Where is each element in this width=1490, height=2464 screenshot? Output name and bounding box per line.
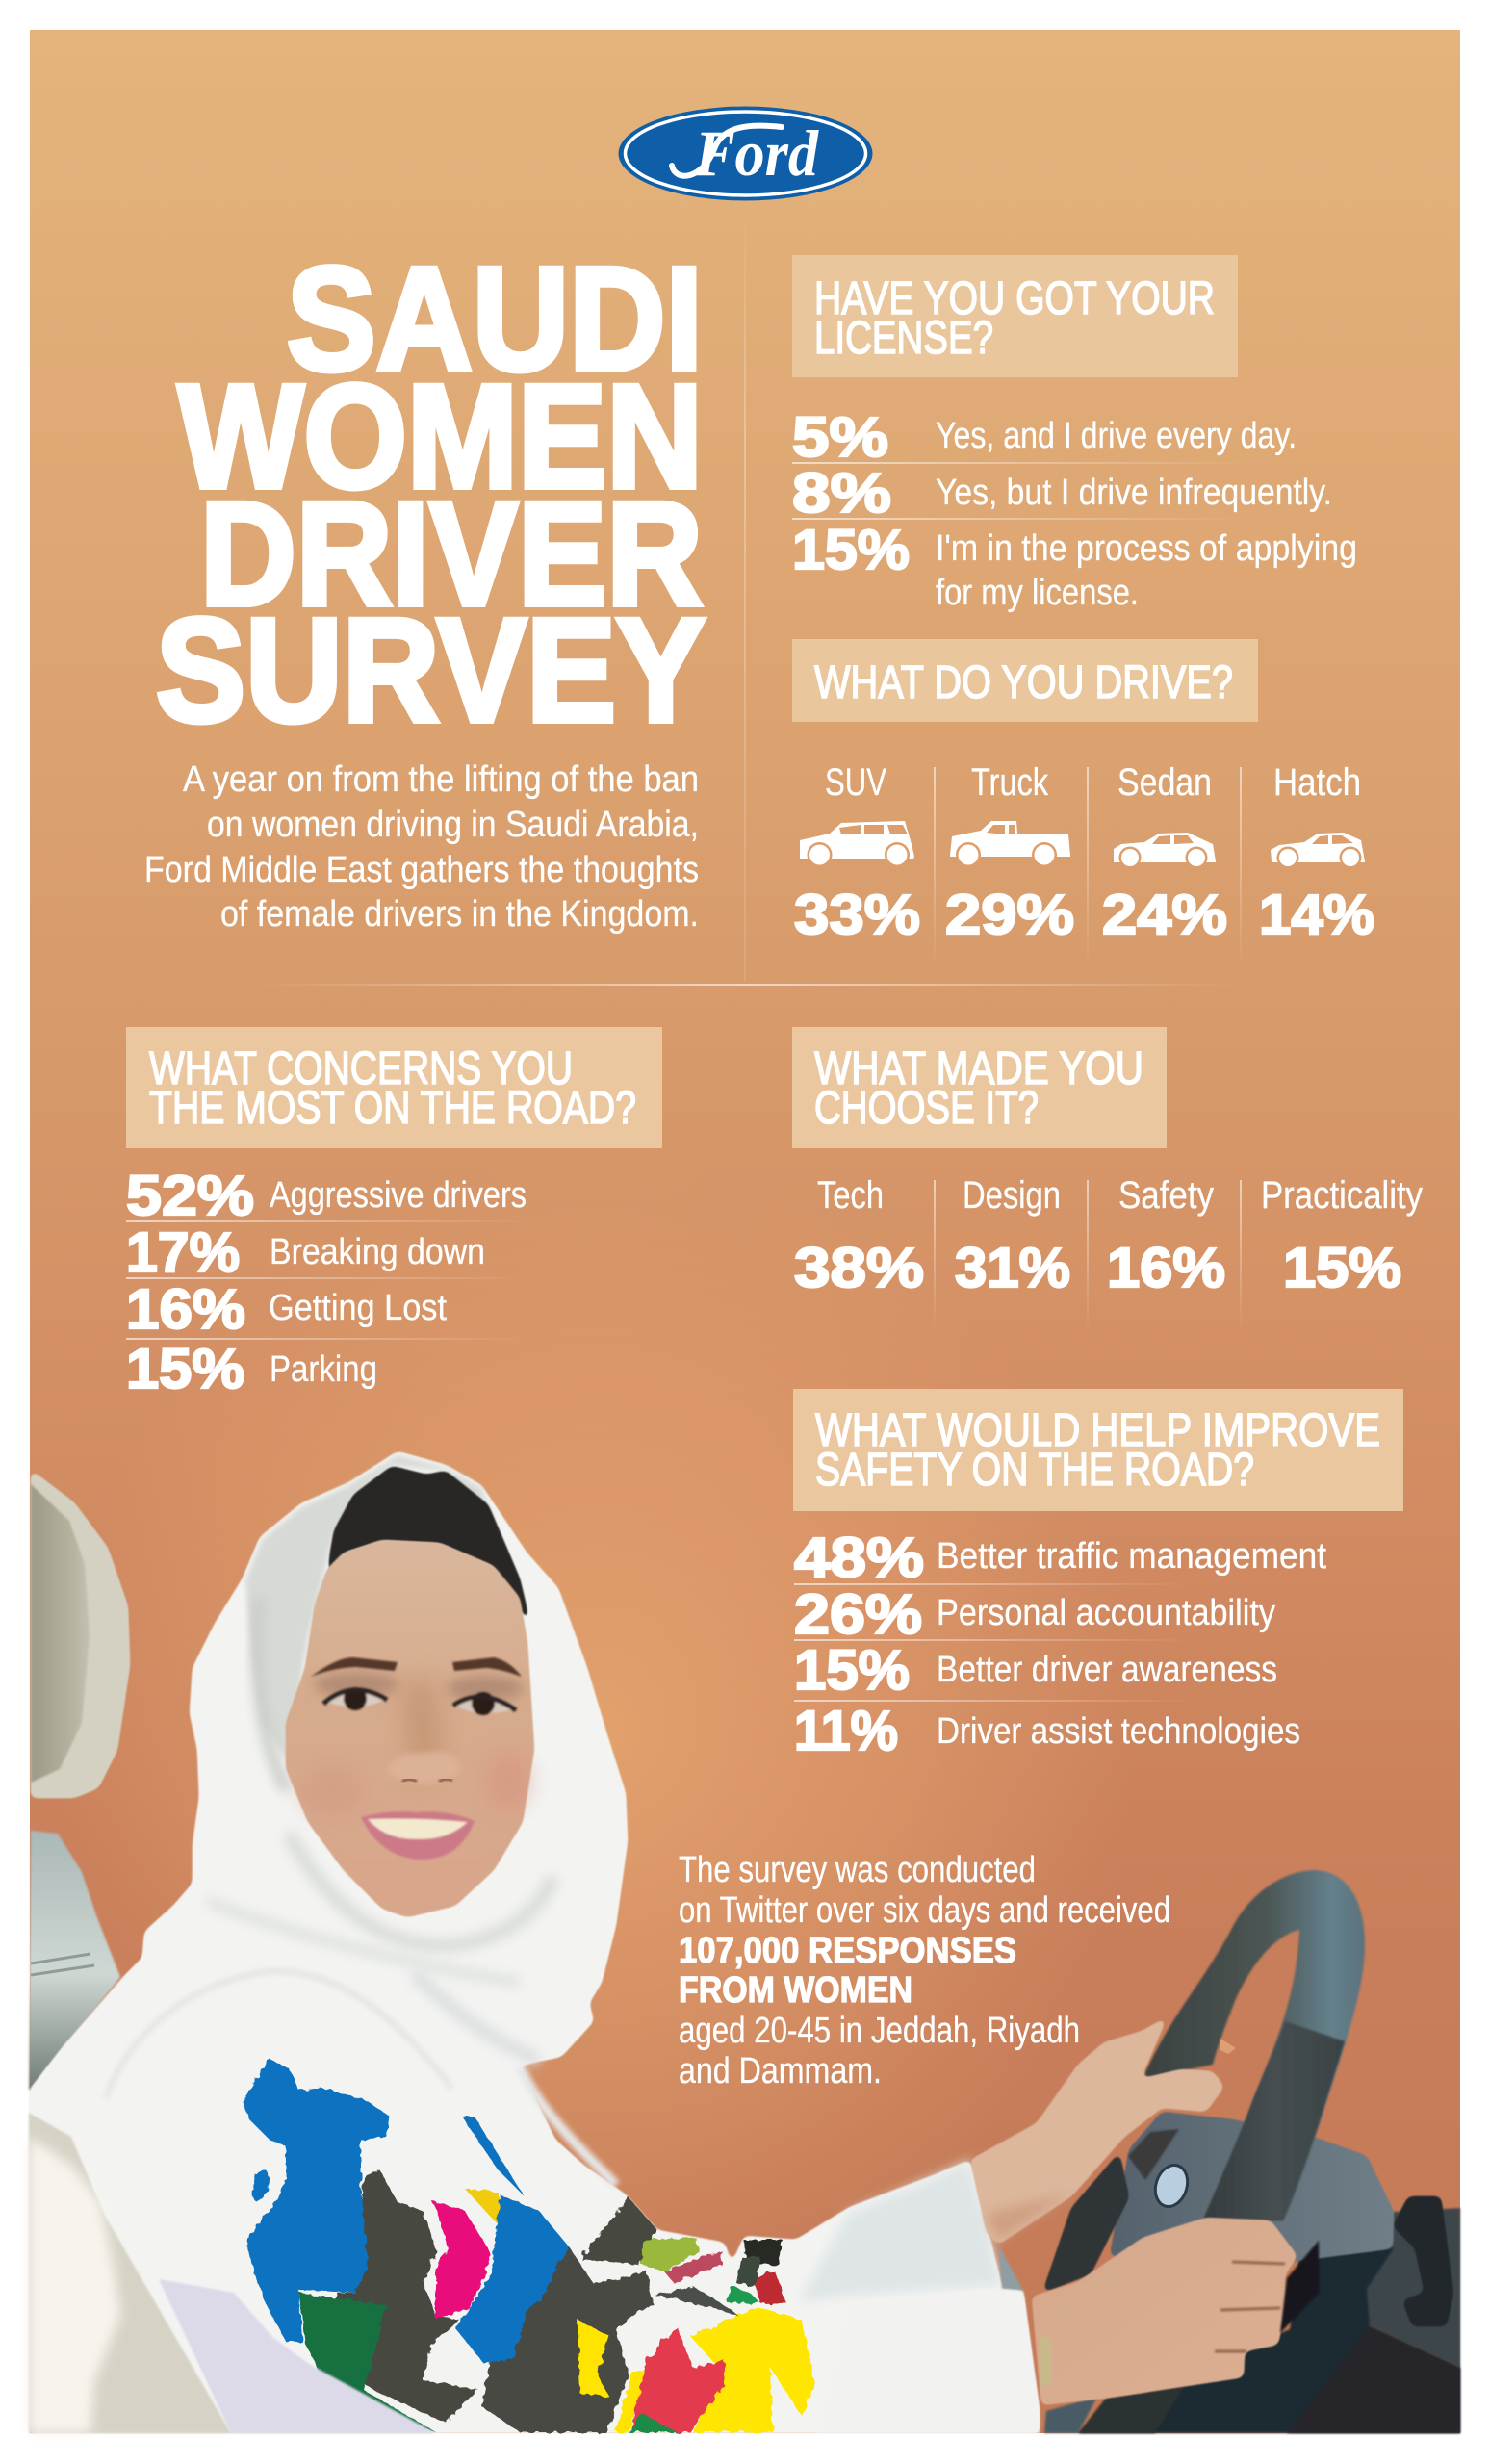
row: 5%: 5% xyxy=(792,406,888,469)
row: 16%: Getting Lost xyxy=(269,1288,447,1328)
intro text: of female drivers in the Kingdom. xyxy=(220,894,699,935)
column: Design xyxy=(955,1174,1070,1299)
heading: license: HAVE YOU GOT YOUR xyxy=(814,273,1215,324)
icon: pickup truck xyxy=(950,821,1070,867)
steering wheel hub xyxy=(1042,2112,1394,2293)
row: 26%: Personal accountability xyxy=(937,1593,1275,1633)
heading: improve safety: WHAT WOULD HELP IMPROVE xyxy=(815,1405,1380,1456)
row: 48%: 48% xyxy=(794,1527,924,1589)
Ford logo xyxy=(618,106,872,200)
hub badge xyxy=(1150,2161,1193,2211)
icon: hatchback xyxy=(1271,833,1365,868)
icon: SUV xyxy=(800,821,914,867)
title: WOMEN xyxy=(178,354,703,519)
seat back xyxy=(29,1831,120,2091)
row: 8%: 8% xyxy=(792,462,891,525)
eyebrows xyxy=(311,1657,522,1677)
sleeve cuff and watch xyxy=(818,2245,1052,2433)
face xyxy=(286,1540,534,1917)
row: 11%: Driver assist technologies xyxy=(937,1711,1300,1752)
row: 11%: 11% xyxy=(794,1700,898,1762)
row: 26%: 26% xyxy=(794,1583,922,1646)
hair xyxy=(327,1466,531,1627)
row: 15%: 15% xyxy=(126,1338,244,1400)
panel: what do you drive xyxy=(792,639,1374,967)
steering column xyxy=(1078,2196,1460,2433)
row: 48% xyxy=(794,1527,1326,1589)
title: DRIVER xyxy=(200,472,703,636)
column: SUV: 33% xyxy=(794,884,920,946)
row: 15% xyxy=(794,1639,1277,1702)
sleeve paint splashes xyxy=(242,2059,815,2432)
blurred foreground seat xyxy=(29,2137,120,2433)
heading: improve safety: SAFETY ON THE ROAD? xyxy=(815,1445,1254,1496)
heading: drive xyxy=(792,639,1258,722)
row: 17%: Breaking down xyxy=(270,1232,485,1272)
column: Practicality: 15% xyxy=(1283,1237,1401,1299)
title: SAUDI xyxy=(287,237,703,401)
heading: improve safety xyxy=(793,1389,1403,1511)
heading: concerns: WHAT CONCERNS YOU xyxy=(149,1043,573,1094)
column: Practicality xyxy=(1261,1174,1423,1299)
column: Truck xyxy=(945,761,1074,946)
column: Sedan: 24% xyxy=(1102,884,1227,946)
heading: concerns: THE MOST ON THE ROAD? xyxy=(149,1083,636,1134)
heading: choose xyxy=(792,1027,1167,1148)
column: Tech: 38% xyxy=(794,1237,924,1299)
row: 15%: 15% xyxy=(794,1639,910,1702)
column: Hatch: 14% xyxy=(1259,884,1374,946)
smile xyxy=(361,1811,475,1860)
survey note: aged 20-45 in Jeddah, Riyadh xyxy=(679,2011,1080,2051)
column: Sedan: Sedan xyxy=(1118,761,1212,804)
row: 8% xyxy=(792,462,1332,525)
column: Design: 31% xyxy=(955,1237,1070,1299)
column: Safety: 16% xyxy=(1107,1237,1225,1299)
car seat side bolster xyxy=(29,2113,231,2433)
row: 17%: 17% xyxy=(126,1221,240,1284)
white hijab and garment xyxy=(29,1451,1040,2433)
background glow behind the woman xyxy=(58,1155,1136,2310)
column: Hatch xyxy=(1259,761,1374,946)
row: 15%: Better driver awareness xyxy=(937,1650,1277,1690)
column: Sedan xyxy=(1102,761,1227,946)
title: SURVEY xyxy=(156,588,706,753)
survey note: FROM WOMEN xyxy=(679,1970,912,2011)
row: 15%: for my license. xyxy=(936,573,1139,613)
column: SUV: SUV xyxy=(825,761,886,804)
heading: choose: CHOOSE IT? xyxy=(814,1083,1039,1134)
intro text xyxy=(144,759,699,935)
Ford logo: Ford xyxy=(694,116,819,190)
row: 15% xyxy=(126,1338,377,1400)
column: Design: Design xyxy=(963,1174,1061,1217)
heading: drive: WHAT DO YOU DRIVE? xyxy=(814,657,1233,708)
headrest xyxy=(31,1470,130,1798)
column: Truck: 29% xyxy=(945,884,1074,946)
panel: license xyxy=(792,255,1357,613)
column: Safety: Safety xyxy=(1118,1174,1214,1217)
row: 8%: Yes, but I drive infrequently. xyxy=(936,473,1332,513)
row: 52%: 52% xyxy=(126,1165,254,1227)
row: 11% xyxy=(794,1700,1300,1762)
row: 52% xyxy=(126,1165,530,1227)
column: Truck: Truck xyxy=(971,761,1049,804)
heading: concerns xyxy=(126,1027,662,1148)
row: 15%: 15% xyxy=(792,519,910,581)
row: 52%: Aggressive drivers xyxy=(270,1175,527,1216)
column: Tech: Tech xyxy=(817,1174,884,1217)
panel: concerns xyxy=(126,1027,662,1400)
intro text: Ford Middle East gathers the thoughts xyxy=(144,850,699,890)
lavender under-garment xyxy=(159,2279,436,2433)
column: Safety xyxy=(1107,1174,1225,1299)
survey note xyxy=(679,1850,1170,2092)
panel: improve safety xyxy=(793,1389,1403,1762)
row: 15% xyxy=(792,519,1357,613)
survey note: 107,000 RESPONSES xyxy=(679,1931,1016,1971)
title xyxy=(156,237,706,753)
column: Hatch: Hatch xyxy=(1273,761,1361,804)
intro text: A year on from the lifting of the ban xyxy=(183,759,699,800)
column: Practicality: Practicality xyxy=(1261,1174,1423,1217)
row: 15%: I'm in the process of applying xyxy=(936,528,1357,569)
panel: what made you choose it xyxy=(792,1027,1423,1330)
row: 5% xyxy=(792,406,1297,469)
heading: license xyxy=(792,255,1238,377)
column: Tech xyxy=(794,1174,924,1299)
icon: sedan xyxy=(1114,833,1216,868)
eyes xyxy=(323,1687,516,1715)
survey note: on Twitter over six days and received xyxy=(679,1890,1170,1931)
lower hand xyxy=(1032,2218,1319,2405)
row: 17% xyxy=(126,1221,530,1284)
steering wheel rim xyxy=(1044,1870,1365,2433)
row: 16% xyxy=(126,1278,530,1341)
intro text: on women driving in Saudi Arabia, xyxy=(207,805,699,845)
column: SUV xyxy=(794,761,920,946)
upper hand and forearm xyxy=(970,2016,1236,2245)
heading: choose: WHAT MADE YOU xyxy=(814,1043,1143,1094)
heading: license: LICENSE? xyxy=(814,313,993,364)
row: 26% xyxy=(794,1583,1275,1646)
photo: woman driving xyxy=(29,1451,1460,2433)
row: 15%: Parking xyxy=(270,1349,377,1390)
row: 5%: Yes, and I drive every day. xyxy=(936,416,1297,456)
survey note: The survey was conducted xyxy=(679,1850,1036,1890)
survey note: and Dammam. xyxy=(679,2051,882,2092)
nose xyxy=(387,1752,460,1784)
row: 48%: Better traffic management xyxy=(937,1536,1326,1577)
row: 16%: 16% xyxy=(126,1278,245,1341)
